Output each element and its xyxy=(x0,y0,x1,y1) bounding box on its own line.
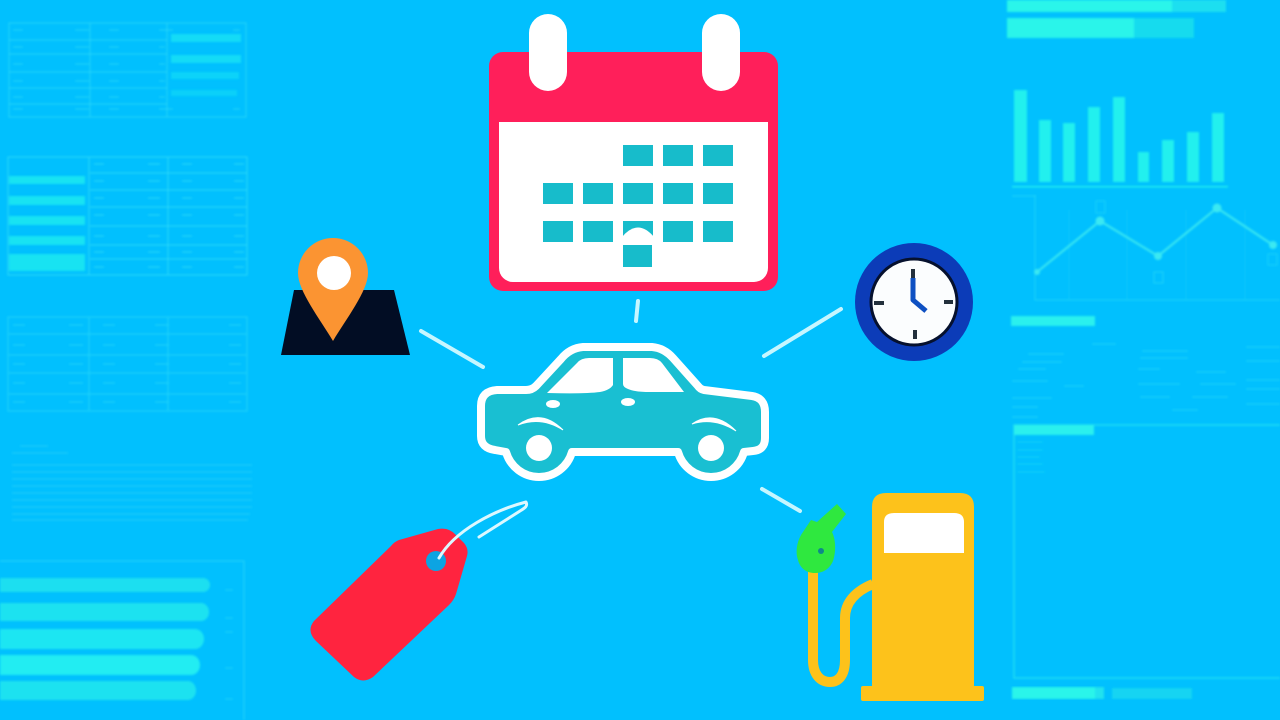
background: middle left table xyxy=(8,157,247,275)
icon: calendar xyxy=(489,14,778,291)
icon: map pin xyxy=(281,238,410,355)
background: column chart xyxy=(1012,90,1228,188)
icon: car xyxy=(481,347,765,477)
background: right text block xyxy=(1011,316,1280,417)
background: paragraph block xyxy=(12,446,252,520)
background: lower left table xyxy=(8,317,247,411)
background: top right bars xyxy=(1007,0,1226,38)
icon: fuel pump xyxy=(797,493,984,701)
icon: price tag xyxy=(310,502,527,680)
background: top left table xyxy=(9,23,246,117)
connector: map to car xyxy=(421,331,483,367)
background: bottom right bars xyxy=(1012,687,1192,699)
background: line chart xyxy=(1012,195,1280,300)
connector: clock to car xyxy=(764,309,841,356)
background: horizontal bar chart xyxy=(0,561,244,720)
icon: clock xyxy=(855,243,973,361)
connector: calendar to car xyxy=(636,301,638,321)
connector: car to fuel xyxy=(762,489,800,511)
background: right panel xyxy=(1014,425,1280,678)
